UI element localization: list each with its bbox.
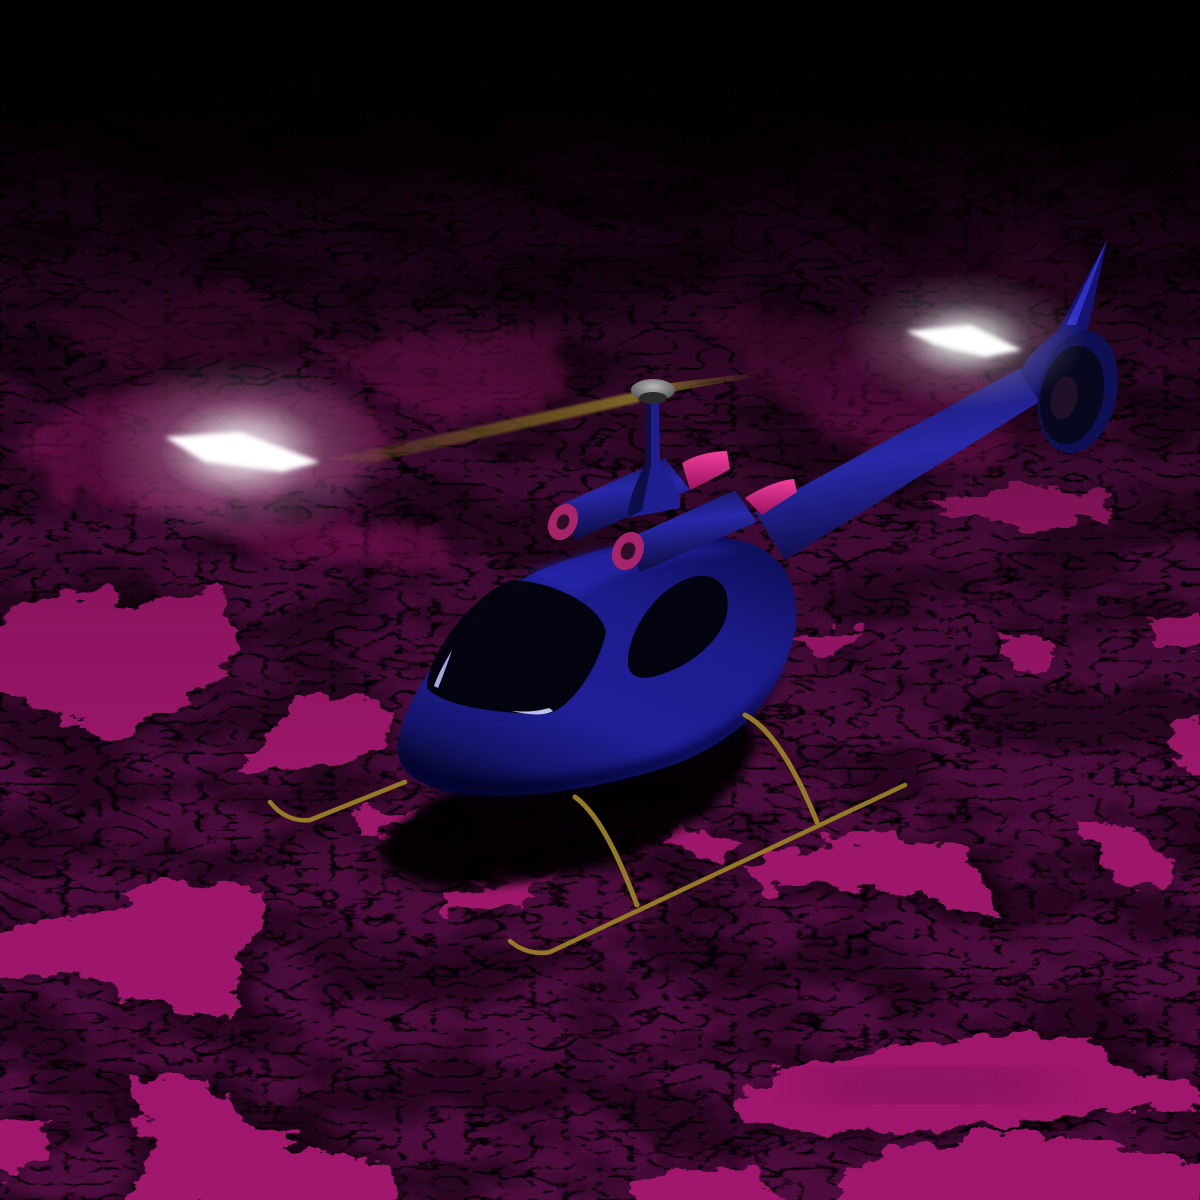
tail boom bbox=[755, 368, 1042, 560]
side window bbox=[628, 576, 728, 678]
rotor mast and hub bbox=[628, 379, 680, 518]
landing skids bbox=[270, 715, 905, 953]
rear engine pod bbox=[542, 451, 730, 545]
dim upper magenta patches bbox=[15, 220, 1120, 570]
front engine pod bbox=[606, 479, 797, 575]
soft shading inside lower patch bbox=[800, 1069, 1060, 1101]
windscreen rim light bbox=[434, 650, 452, 688]
right rotor light glow bbox=[845, 270, 1085, 410]
smooth magenta terrain patches bbox=[0, 488, 1200, 1200]
left rotor light glow bbox=[92, 355, 392, 545]
helicopter ground shadow bbox=[378, 720, 754, 886]
fuselage upper highlight bbox=[525, 543, 740, 598]
rotor blades bbox=[325, 373, 755, 462]
cockpit windscreen bbox=[427, 580, 606, 714]
fuselage underside shadow bbox=[402, 650, 790, 796]
windscreen lower glint bbox=[512, 708, 553, 714]
fuselage bbox=[398, 536, 796, 796]
tail fin and tail rotor bbox=[1020, 240, 1129, 461]
dark rims around magenta patches bbox=[0, 590, 1200, 1200]
